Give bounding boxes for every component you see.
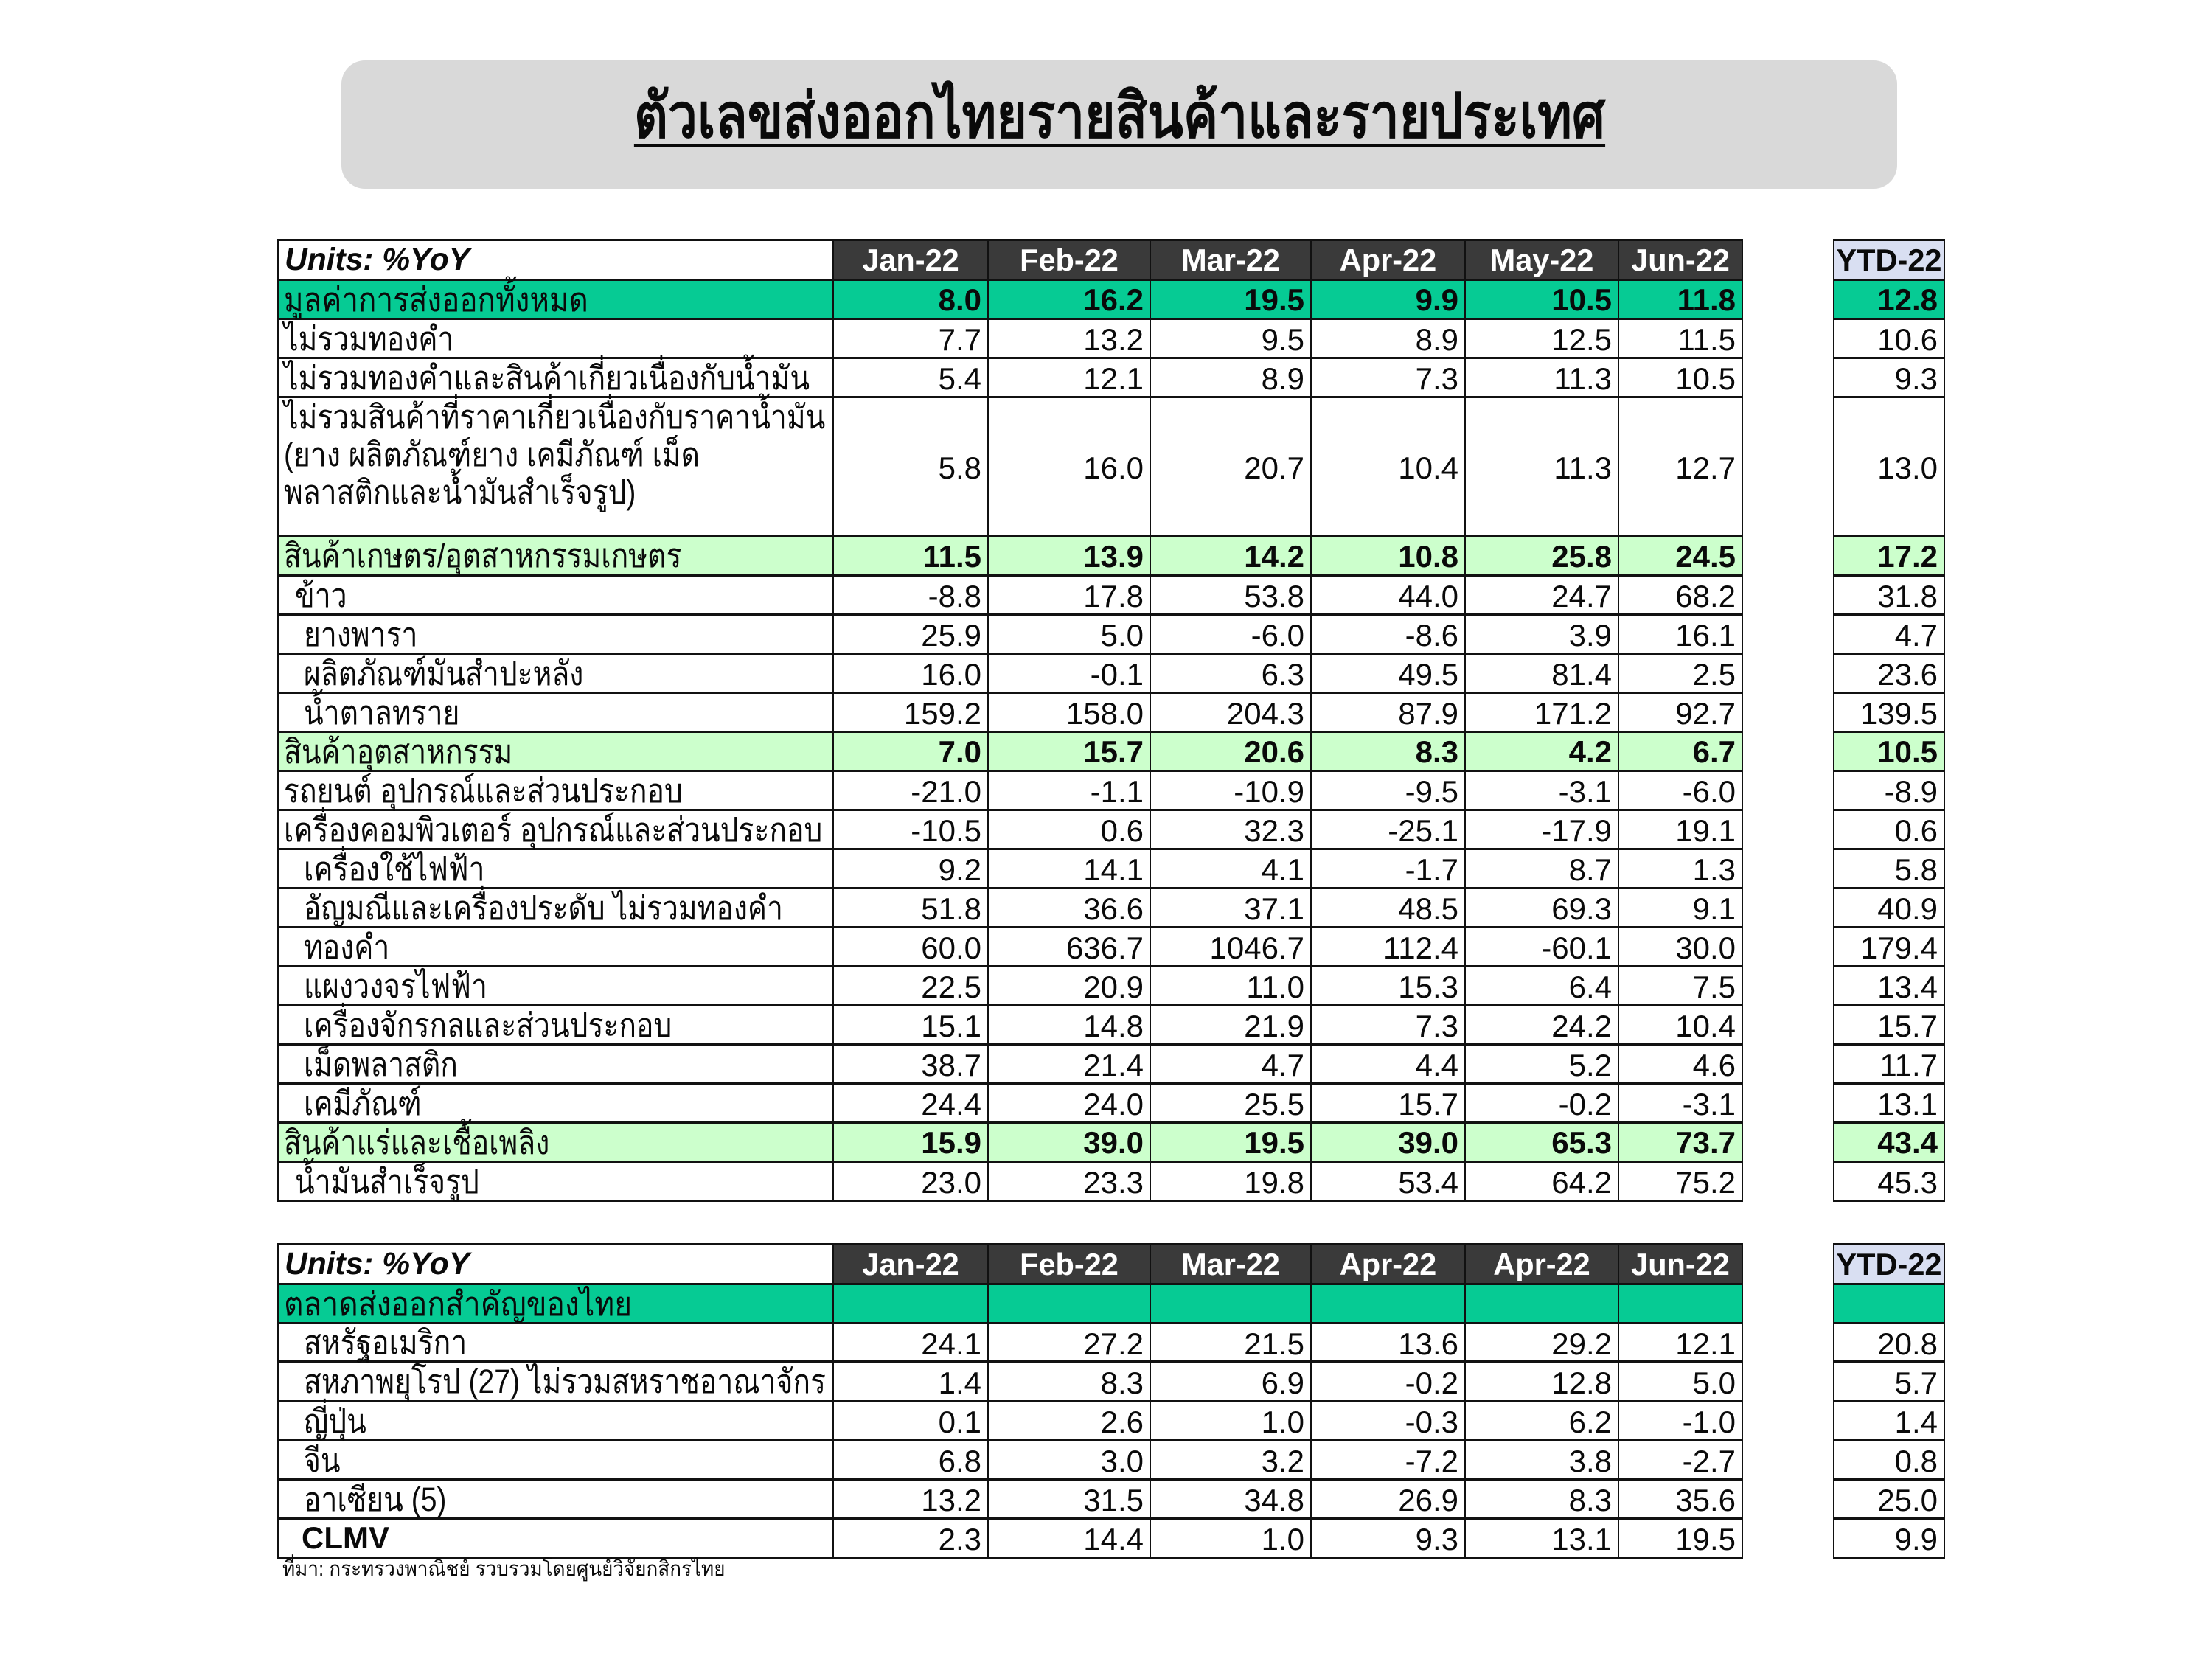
section row: industrial goods: 6.7 — [1693, 734, 1736, 769]
YTD chemicals: 13.1 — [1877, 1087, 1938, 1121]
section row: industrial goods: 20.6 — [1244, 734, 1304, 769]
row: CLMV: 1.0 — [1262, 1522, 1304, 1557]
row: vehicles: -1.1 — [1091, 774, 1144, 809]
YTD Japan: 1.4 — [1895, 1405, 1938, 1439]
YTD excluding gold and oil-related: 9.3 — [1895, 361, 1938, 396]
row: cassava products: 6.3 — [1262, 657, 1304, 692]
row: gold — [304, 928, 1736, 966]
row: ASEAN 5: 26.9 — [1398, 1483, 1458, 1517]
row: plastic pellets: 4.6 — [1693, 1048, 1736, 1082]
row: electrical appliances: 1.3 — [1693, 852, 1736, 887]
row: machinery: 15.1 — [921, 1009, 981, 1043]
row: machinery: 10.4 — [1675, 1009, 1736, 1043]
row: plastic pellets — [304, 1046, 1736, 1082]
row: gold: 636.7 — [1066, 931, 1144, 965]
row: China: 3.8 — [1569, 1444, 1612, 1478]
row: circuit boards: 7.5 — [1693, 970, 1736, 1004]
row: EU 27: 1.4 — [939, 1366, 981, 1399]
row: total export value: 11.8 — [1677, 282, 1736, 317]
row: refined oil: 53.4 — [1398, 1165, 1458, 1200]
row: cassava products: 2.5 — [1693, 657, 1736, 692]
row: USA: 24.1 — [921, 1326, 981, 1361]
section row: key export markets — [278, 1284, 1742, 1323]
row: excluding gold — [282, 320, 1736, 357]
row: EU 27 — [278, 1361, 1742, 1401]
section row: agricultural goods: 14.2 — [1244, 538, 1304, 574]
row: CLMV: 9.3 — [1416, 1522, 1458, 1557]
row: China: -7.2 — [1405, 1444, 1458, 1478]
row: excluding gold and oil-related goods: ไม่รวมทองคำและสินค้าเกี่ยวเนื่องกับน้ำมัน — [284, 358, 810, 397]
row: China: -2.7 — [1683, 1444, 1736, 1478]
row: excluding oil-price-related goods: 10.4 — [1398, 450, 1458, 485]
row: sugar: 171.2 — [1534, 696, 1612, 731]
row: excluding oil-price-related goods: 5.8 — [939, 450, 981, 485]
YTD header: YTD-22 — [1836, 1247, 1941, 1281]
header row: units and months: Mar-22 — [1181, 1247, 1280, 1281]
row: excluding gold: 8.9 — [1416, 322, 1458, 357]
row: EU 27: 8.3 — [1101, 1366, 1144, 1399]
row: excluding gold and oil-related goods: 5.4 — [939, 361, 981, 396]
panel: export markets table — [277, 1243, 1743, 1559]
row: gold: 1046.7 — [1210, 931, 1304, 965]
row: CLMV: CLMV — [302, 1520, 389, 1555]
row: refined oil: 75.2 — [1675, 1165, 1736, 1200]
row: ASEAN 5: 8.3 — [1569, 1483, 1612, 1517]
row: electrical appliances: 14.1 — [1083, 852, 1144, 887]
row: machinery: 21.9 — [1244, 1009, 1304, 1043]
row: Japan: 6.2 — [1569, 1405, 1612, 1439]
YTD ASEAN 5: 25.0 — [1877, 1483, 1938, 1517]
section row: minerals and fuels: 73.7 — [1675, 1125, 1736, 1160]
row: excluding gold: 9.5 — [1262, 322, 1304, 357]
row: excluding oil-price-related goods: พลาสติกและน้ำมันสำเร็จรูป) — [284, 473, 636, 511]
header row: units and months: Units: %YoY — [285, 1247, 470, 1281]
row: circuit boards: 20.9 — [1083, 970, 1144, 1004]
row: refined oil: น้ำมันสำเร็จรูป — [295, 1162, 479, 1200]
row: excluding oil-price-related goods: (ยาง ผลิตภัณฑ์ยาง เคมีภัณฑ์ เม็ด — [284, 436, 700, 473]
section row: minerals and fuels: 19.5 — [1244, 1125, 1304, 1160]
title banner: ตัวเลขส่งออกไทยรายสินค้าและรายประเทศ — [633, 81, 1605, 150]
section row: agricultural goods: สินค้าเกษตร/อุตสาหกรรมเกษตร — [284, 537, 681, 574]
row: rubber: 16.1 — [1675, 618, 1736, 653]
row: chemicals: 25.5 — [1244, 1087, 1304, 1121]
section row: industrial goods: 15.7 — [1083, 734, 1144, 769]
section row: minerals and fuels: 65.3 — [1551, 1125, 1612, 1160]
YTD refined oil: 45.3 — [1877, 1165, 1938, 1200]
YTD computers: 0.6 — [1895, 813, 1938, 848]
row: jewellery excluding gold: 36.6 — [1083, 891, 1144, 926]
row: chemicals: -0.2 — [1559, 1087, 1612, 1121]
row: rice — [295, 577, 1736, 613]
row: total export value — [279, 276, 1742, 319]
YTD appliances: 5.8 — [1895, 852, 1938, 887]
row: rice: 24.7 — [1551, 579, 1612, 613]
row: sugar: น้ำตาลทราย — [304, 693, 459, 731]
row: ASEAN 5 — [278, 1479, 1742, 1519]
header row: units and months: Jun-22 — [1631, 1247, 1730, 1281]
row: circuit boards: 11.0 — [1246, 970, 1304, 1004]
row: CLMV: 2.3 — [939, 1522, 981, 1557]
YTD EU 27: 5.7 — [1895, 1366, 1938, 1399]
row: rice: ข้าว — [295, 577, 347, 613]
row: vehicles: -10.9 — [1234, 774, 1304, 809]
row: vehicles: -6.0 — [1683, 774, 1736, 809]
panel: product YTD column — [1833, 239, 1945, 1202]
header row: units and months: Feb-22 — [1020, 243, 1119, 277]
row: USA: สหรัฐอเมริกา — [304, 1324, 467, 1361]
row: Japan: 0.1 — [939, 1405, 981, 1439]
row: computers: -17.9 — [1541, 813, 1612, 848]
row: rubber: 3.9 — [1569, 618, 1612, 653]
row: chemicals — [304, 1084, 1736, 1122]
row: USA: 27.2 — [1083, 1326, 1144, 1361]
section row: industrial goods: 8.3 — [1416, 734, 1458, 769]
row: refined oil: 23.3 — [1083, 1165, 1144, 1200]
row: vehicles: -3.1 — [1559, 774, 1612, 809]
row: sugar: 159.2 — [904, 696, 981, 731]
row: total export value: 10.5 — [1551, 282, 1612, 317]
panel: monthly export growth by product table — [277, 239, 1743, 1202]
source note: ที่มา: กระทรวงพาณิชย์ รวบรวมโดยศูนย์วิจัยกสิกรไทย — [282, 1557, 725, 1580]
row: rice: -8.8 — [928, 579, 981, 613]
row: CLMV: 14.4 — [1083, 1522, 1144, 1557]
row: total export value: 9.9 — [1416, 282, 1458, 317]
row: gold: 60.0 — [921, 931, 981, 965]
row: rice: 68.2 — [1675, 579, 1736, 613]
row: rubber: ยางพารา — [304, 615, 417, 653]
row: ASEAN 5: อาเซียน (5) — [304, 1481, 446, 1517]
row: EU 27: 6.9 — [1262, 1366, 1304, 1399]
row: sugar — [304, 689, 1736, 731]
row: vehicles — [284, 771, 1736, 810]
row: China: 6.8 — [939, 1444, 981, 1478]
row: jewellery excluding gold: 48.5 — [1398, 891, 1458, 926]
row: electrical appliances: -1.7 — [1405, 852, 1458, 887]
row: rubber: 5.0 — [1101, 618, 1144, 653]
YTD industrial goods: 10.5 — [1877, 734, 1938, 769]
row: jewellery excluding gold: 37.1 — [1244, 891, 1304, 926]
section row: agricultural goods: 11.5 — [923, 538, 981, 574]
row: ASEAN 5: 31.5 — [1083, 1483, 1144, 1517]
row: USA: 29.2 — [1551, 1326, 1612, 1361]
row: total export value: 19.5 — [1244, 282, 1304, 317]
row: excluding gold: 7.7 — [939, 322, 981, 357]
row: excluding gold and oil-related goods — [282, 354, 1736, 397]
row: machinery: 24.2 — [1551, 1009, 1612, 1043]
row: circuit boards: 22.5 — [921, 970, 981, 1004]
section row: minerals and fuels: 15.9 — [921, 1125, 981, 1160]
row: machinery: 14.8 — [1083, 1009, 1144, 1043]
header row: units and months: Mar-22 — [1181, 243, 1280, 277]
row: rice: 17.8 — [1083, 579, 1144, 613]
row: excluding oil-price-related goods — [282, 394, 1736, 512]
header row: units and months — [278, 1245, 1742, 1557]
row: plastic pellets: 4.7 — [1262, 1048, 1304, 1082]
YTD circuit boards: 13.4 — [1877, 970, 1938, 1004]
row: Japan: 2.6 — [1101, 1405, 1144, 1439]
row: refined oil: 23.0 — [921, 1165, 981, 1200]
row: excluding oil-price-related goods: ไม่รวมสินค้าที่ราคาเกี่ยวเนื่องกับราคาน้ำมัน — [284, 398, 825, 436]
row: total export value: มูลค่าการส่งออกทั้งหมด — [284, 280, 588, 319]
YTD total exports: 12.8 — [1877, 282, 1938, 317]
row: USA: 12.1 — [1675, 1326, 1736, 1361]
section row: minerals and fuels: สินค้าแร่และเชื้อเพลิง — [284, 1124, 549, 1161]
row: gold: ทองคำ — [304, 928, 389, 966]
YTD gold: 179.4 — [1860, 931, 1938, 965]
row: gold: 30.0 — [1675, 931, 1736, 965]
row: excluding gold: 12.5 — [1551, 322, 1612, 357]
section row: industrial goods: 4.2 — [1569, 734, 1612, 769]
row: electrical appliances — [304, 846, 1736, 888]
row: Japan: -0.3 — [1405, 1405, 1458, 1439]
row: CLMV: 19.5 — [1675, 1522, 1736, 1557]
row: computers: 0.6 — [1101, 813, 1144, 848]
row: jewellery excluding gold: 51.8 — [921, 891, 981, 926]
row: cassava products — [304, 655, 1736, 692]
header row: units and months: Apr-22 — [1493, 1247, 1590, 1281]
row: excluding gold and oil-related goods: 10.5 — [1675, 361, 1736, 396]
row: electrical appliances: 4.1 — [1262, 852, 1304, 887]
section row: agricultural goods: 25.8 — [1551, 538, 1612, 574]
row: excluding gold and oil-related goods: 7.3 — [1416, 361, 1458, 396]
row: plastic pellets: เม็ดพลาสติก — [304, 1046, 458, 1082]
YTD section row — [1834, 1284, 1944, 1323]
row: rubber: -8.6 — [1405, 618, 1458, 653]
row: vehicles: -9.5 — [1405, 774, 1458, 809]
row: circuit boards: 6.4 — [1569, 970, 1612, 1004]
row: rubber: -6.0 — [1251, 618, 1304, 653]
row: gold: 112.4 — [1383, 931, 1458, 965]
section row: minerals and fuels: 39.0 — [1083, 1125, 1144, 1160]
row: ASEAN 5: 13.2 — [921, 1483, 981, 1517]
header row: units and months: Jun-22 — [1631, 243, 1730, 277]
row: jewellery excluding gold: อัญมณีและเครื่องประดับ ไม่รวมทองคำ — [304, 889, 783, 926]
row: computers: -10.5 — [911, 813, 981, 848]
row: USA: 13.6 — [1398, 1326, 1458, 1361]
row: computers: 32.3 — [1244, 813, 1304, 848]
header row: units and months — [279, 241, 1742, 1200]
row: jewellery excluding gold — [304, 885, 1736, 926]
section row: minerals and fuels: 39.0 — [1398, 1125, 1458, 1160]
row: excluding gold and oil-related goods: 11.3 — [1554, 361, 1612, 396]
YTD excluding oil-price-related: 13.0 — [1877, 450, 1938, 485]
YTD excluding gold: 10.6 — [1877, 322, 1938, 357]
row: circuit boards: แผงวงจรไฟฟ้า — [304, 967, 487, 1004]
row: EU 27: 12.8 — [1551, 1366, 1612, 1399]
row: EU 27: 5.0 — [1693, 1366, 1736, 1399]
section row: industrial goods: สินค้าอุตสาหกรรม — [284, 733, 512, 770]
title banner — [341, 60, 1897, 189]
row: Japan: 1.0 — [1262, 1405, 1304, 1439]
row: plastic pellets: 5.2 — [1569, 1048, 1612, 1082]
YTD agricultural goods: 17.2 — [1877, 538, 1938, 574]
YTD USA: 20.8 — [1877, 1326, 1938, 1361]
panel: market YTD column — [1833, 1243, 1945, 1559]
row: sugar: 92.7 — [1675, 696, 1736, 731]
header row: units and months: Jan-22 — [862, 243, 959, 277]
section row: agricultural goods: 10.8 — [1398, 538, 1458, 574]
row: USA: 21.5 — [1244, 1326, 1304, 1361]
YTD sugar: 139.5 — [1860, 696, 1938, 731]
row: EU 27: สหภาพยุโรป (27) ไม่รวมสหราชอาณาจักร — [304, 1363, 826, 1400]
row: rice: 44.0 — [1398, 579, 1458, 613]
section row: agricultural goods: 13.9 — [1083, 538, 1144, 574]
row: excluding oil-price-related goods: 16.0 — [1083, 450, 1144, 485]
row: machinery: เครื่องจักรกลและส่วนประกอบ — [304, 1006, 672, 1044]
YTD CLMV: 9.9 — [1895, 1522, 1938, 1557]
row: CLMV: 13.1 — [1551, 1522, 1612, 1557]
row: excluding oil-price-related goods: 11.3 — [1554, 450, 1612, 485]
YTD header — [1834, 1245, 1944, 1557]
row: excluding gold: 13.2 — [1083, 322, 1144, 357]
YTD vehicles: -8.9 — [1885, 774, 1938, 809]
YTD jewellery: 40.9 — [1877, 891, 1938, 926]
row: cassava products: 81.4 — [1551, 657, 1612, 692]
row: excluding gold: 11.5 — [1677, 322, 1736, 357]
row: ASEAN 5: 34.8 — [1244, 1483, 1304, 1517]
row: China: 3.2 — [1262, 1444, 1304, 1478]
row: excluding gold: ไม่รวมทองคำ — [284, 320, 453, 357]
row: vehicles: -21.0 — [911, 774, 981, 809]
row: CLMV — [278, 1519, 1742, 1557]
section row: key export markets: ตลาดส่งออกสำคัญของไทย — [284, 1284, 632, 1323]
YTD China: 0.8 — [1895, 1444, 1938, 1478]
header row: units and months: Jan-22 — [862, 1247, 959, 1281]
row: rice: 53.8 — [1244, 579, 1304, 613]
row: machinery — [304, 1003, 1736, 1044]
row: computers: เครื่องคอมพิวเตอร์ อุปกรณ์และส่วนประกอบ — [284, 811, 822, 848]
YTD plastic pellets: 11.7 — [1879, 1048, 1938, 1082]
row: total export value: 16.2 — [1083, 282, 1144, 317]
row: rubber — [304, 615, 1736, 653]
row: chemicals: 24.4 — [921, 1087, 981, 1121]
row: EU 27: -0.2 — [1405, 1366, 1458, 1399]
YTD minerals and fuels: 43.4 — [1877, 1125, 1938, 1160]
YTD header — [1834, 241, 1944, 1200]
row: jewellery excluding gold: 69.3 — [1551, 891, 1612, 926]
row: China: 3.0 — [1101, 1444, 1144, 1478]
row: cassava products: -0.1 — [1091, 657, 1144, 692]
row: rubber: 25.9 — [921, 618, 981, 653]
row: jewellery excluding gold: 9.1 — [1693, 891, 1736, 926]
section row: minerals and fuels — [279, 1119, 1742, 1161]
section row: agricultural goods: 24.5 — [1675, 538, 1736, 574]
row: chemicals: เคมีภัณฑ์ — [304, 1084, 422, 1122]
row: excluding oil-price-related goods: 12.7 — [1675, 450, 1736, 485]
row: plastic pellets: 4.4 — [1416, 1048, 1458, 1082]
row: excluding gold and oil-related goods: 12.1 — [1083, 361, 1144, 396]
section row: agricultural goods — [279, 537, 1742, 574]
row: sugar: 158.0 — [1066, 696, 1144, 731]
row: excluding oil-price-related goods: 20.7 — [1244, 450, 1304, 485]
row: electrical appliances: 8.7 — [1569, 852, 1612, 887]
YTD rice: 31.8 — [1877, 579, 1938, 613]
row: cassava products: 49.5 — [1398, 657, 1458, 692]
row: cassava products: 16.0 — [921, 657, 981, 692]
header row: units and months: Apr-22 — [1340, 243, 1436, 277]
row: chemicals: -3.1 — [1683, 1087, 1736, 1121]
row: Japan: -1.0 — [1683, 1405, 1736, 1439]
row: computers: 19.1 — [1675, 813, 1736, 848]
header row: units and months: Feb-22 — [1020, 1247, 1119, 1281]
row: refined oil: 64.2 — [1551, 1165, 1612, 1200]
section row: industrial goods — [279, 733, 1742, 770]
row: circuit boards — [304, 967, 1736, 1004]
row: plastic pellets: 21.4 — [1083, 1048, 1144, 1082]
row: electrical appliances: เครื่องใช้ไฟฟ้า — [304, 849, 484, 888]
YTD cassava: 23.6 — [1877, 657, 1938, 692]
row: China — [278, 1441, 1742, 1479]
row: cassava products: ผลิตภัณฑ์มันสำปะหลัง — [304, 655, 583, 692]
row: refined oil: 19.8 — [1244, 1165, 1304, 1200]
row: electrical appliances: 9.2 — [939, 852, 981, 887]
row: gold: -60.1 — [1541, 931, 1612, 965]
row: refined oil — [295, 1158, 1736, 1200]
row: Japan: ญี่ปุ่น — [304, 1402, 366, 1439]
section row: industrial goods: 7.0 — [939, 734, 981, 769]
YTD rubber: 4.7 — [1895, 618, 1938, 653]
header row: units and months: Units: %YoY — [285, 243, 470, 277]
row: chemicals: 15.7 — [1398, 1087, 1458, 1121]
row: circuit boards: 15.3 — [1398, 970, 1458, 1004]
row: plastic pellets: 38.7 — [921, 1048, 981, 1082]
row: machinery: 7.3 — [1416, 1009, 1458, 1043]
row: chemicals: 24.0 — [1083, 1087, 1144, 1121]
row: vehicles: รถยนต์ อุปกรณ์และส่วนประกอบ — [284, 771, 683, 810]
row: computers: -25.1 — [1388, 813, 1458, 848]
YTD machinery: 15.7 — [1877, 1009, 1938, 1043]
row: sugar: 87.9 — [1398, 696, 1458, 731]
row: total export value: 8.0 — [939, 282, 981, 317]
row: China: จีน — [304, 1441, 341, 1479]
row: Japan — [278, 1401, 1742, 1441]
row: excluding gold and oil-related goods: 8.9 — [1262, 361, 1304, 396]
row: computers — [284, 807, 1736, 848]
row: ASEAN 5: 35.6 — [1675, 1483, 1736, 1517]
header row: units and months: May-22 — [1490, 243, 1593, 277]
header row: units and months: Apr-22 — [1340, 1247, 1436, 1281]
row: USA — [278, 1323, 1742, 1361]
row: sugar: 204.3 — [1227, 696, 1304, 731]
YTD header: YTD-22 — [1836, 243, 1941, 277]
